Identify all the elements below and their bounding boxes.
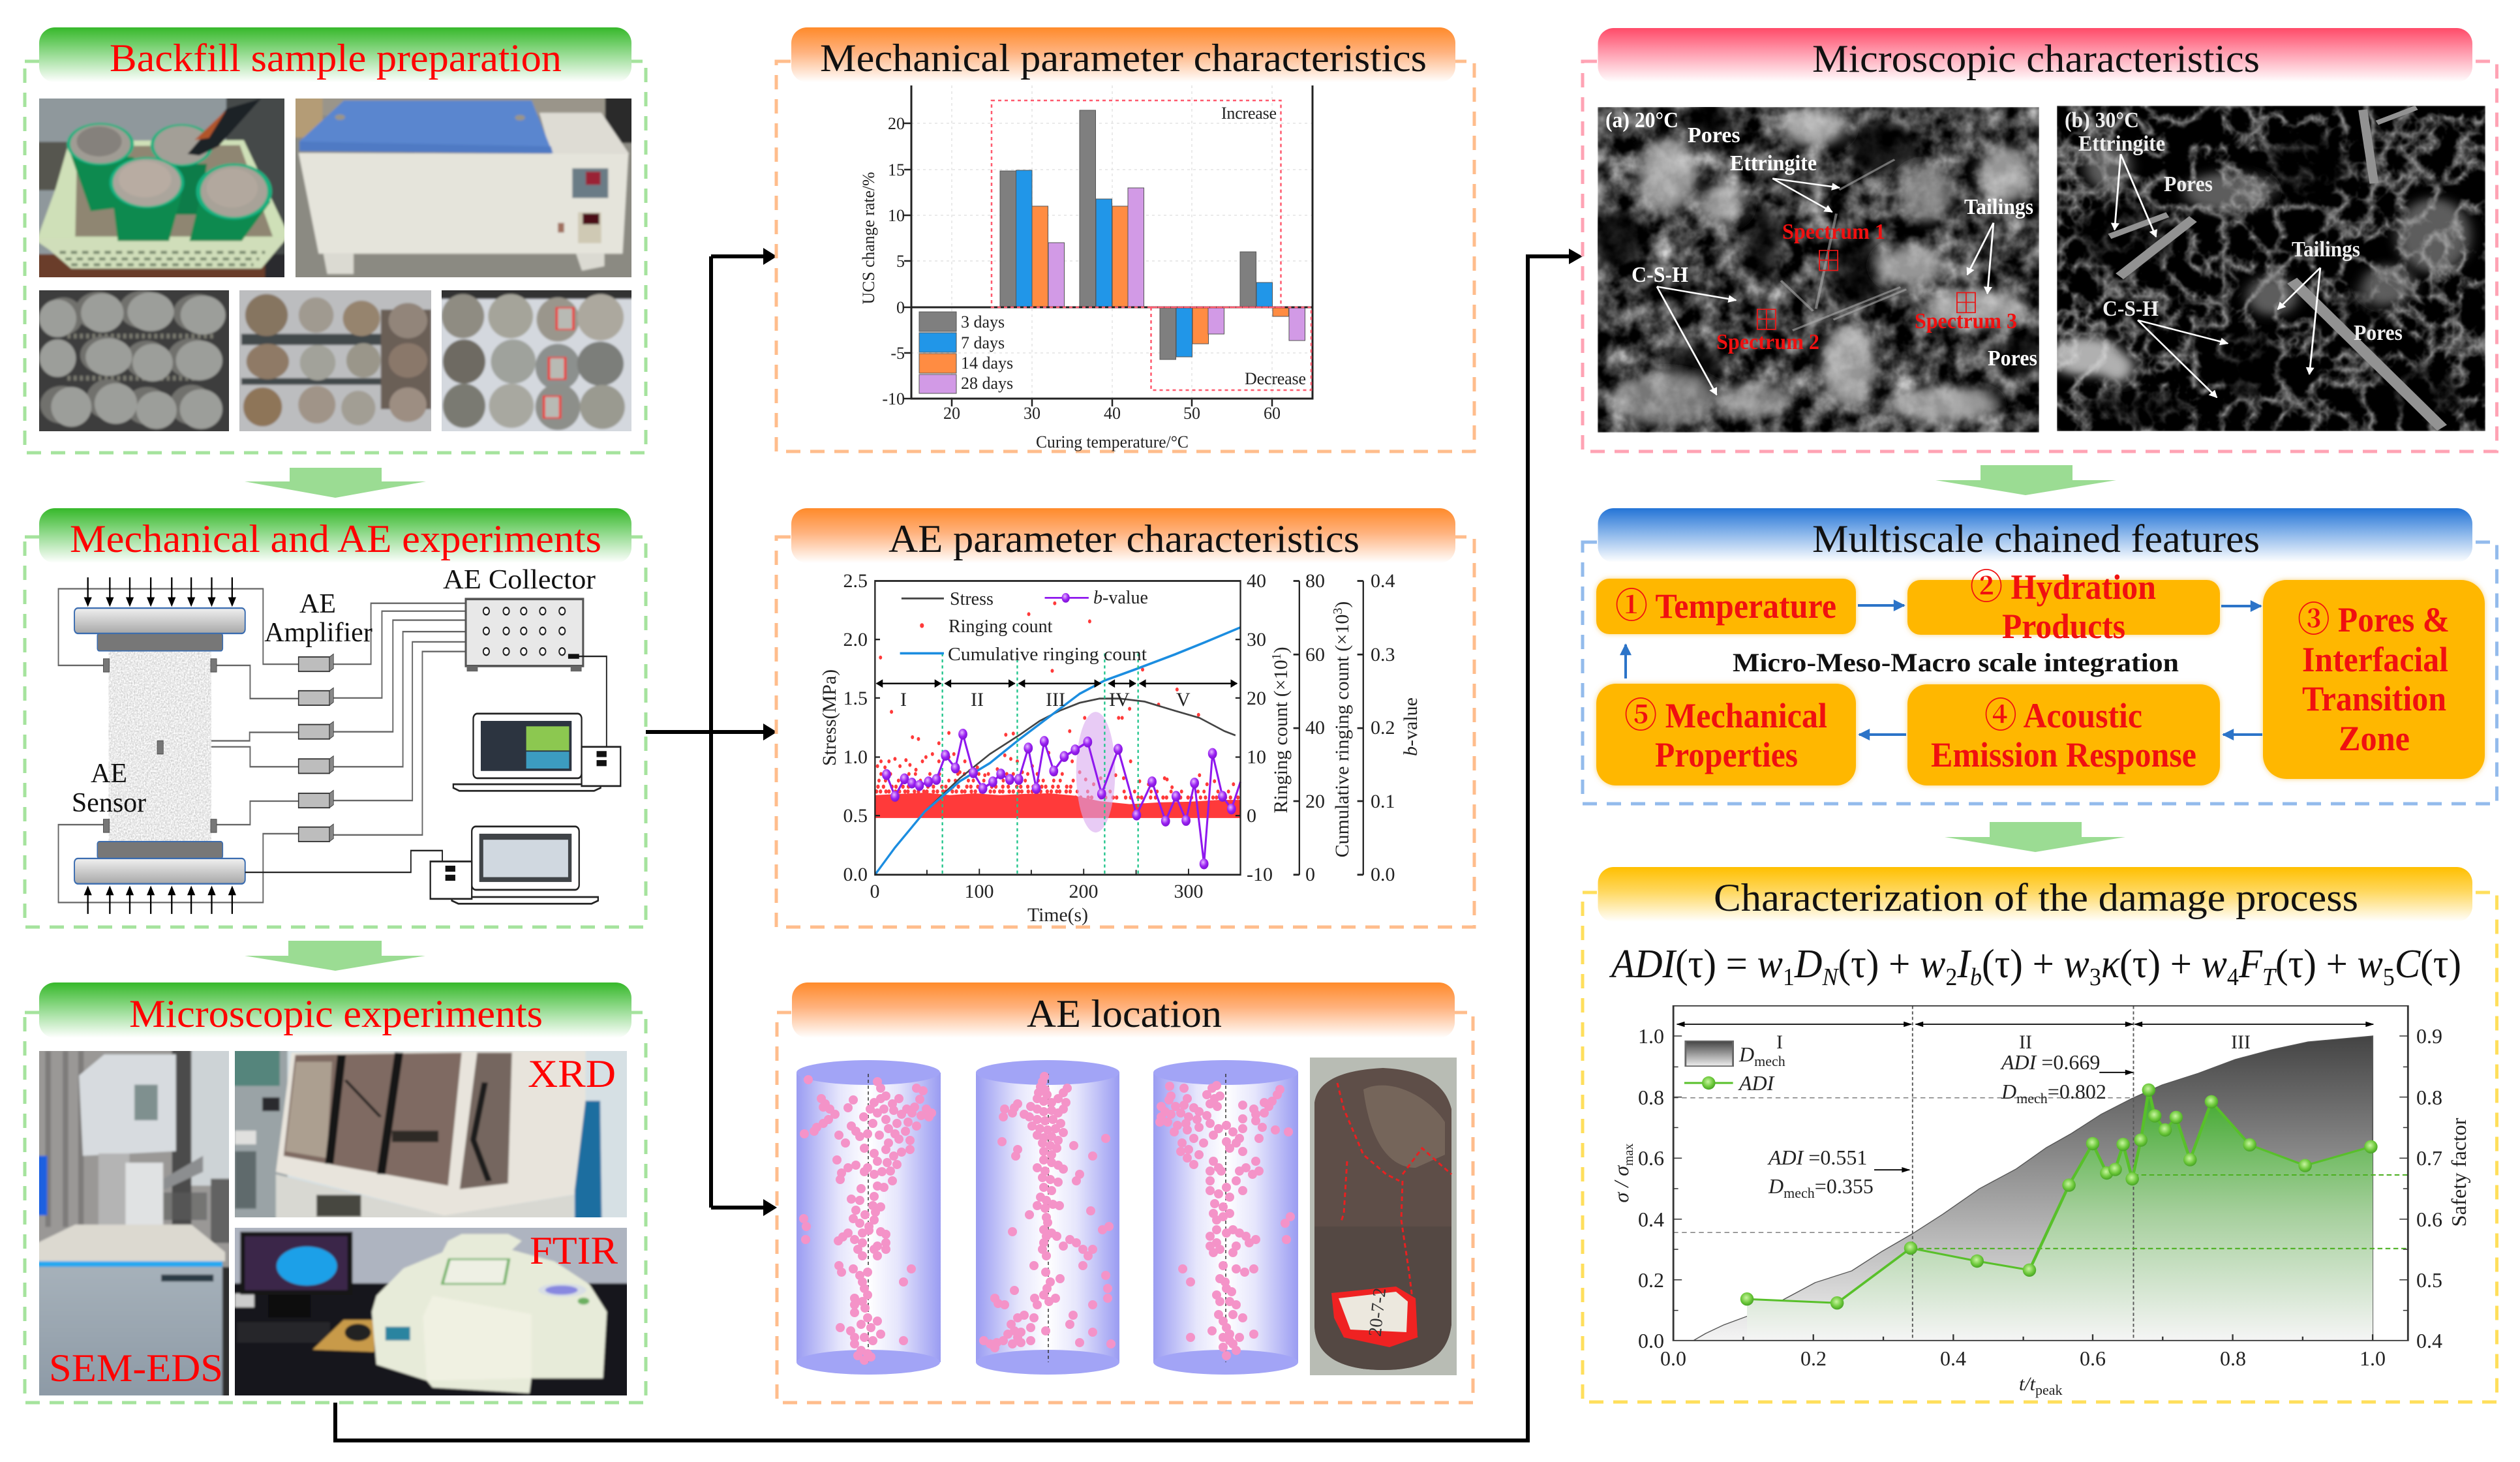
photo: XRD instrument bbox=[230, 1048, 632, 1220]
photo: failed specimen with crack bbox=[1310, 1058, 1457, 1375]
box: acoustic emission response: ④ Acoustic bbox=[1984, 696, 2142, 735]
chart: damage index and stress: max bbox=[1622, 1144, 1636, 1166]
line chart: stress, ringing count and b-value over time: I bbox=[900, 689, 907, 710]
legend bbox=[948, 588, 1148, 665]
legend: ADI bbox=[1738, 1071, 1775, 1095]
SEM labels (a): Pores bbox=[1688, 123, 1740, 147]
SEM image: (a) 20 C bbox=[1592, 99, 2043, 433]
box: pores and interfacial transition zone: Zone bbox=[2339, 719, 2410, 758]
equation: ADI: ADI(τ) = w bbox=[1611, 942, 1784, 986]
line chart: stress, ringing count and b-value over time: 1 bbox=[1269, 653, 1284, 660]
line chart: stress, ringing count and b-value over time: 2.5 bbox=[843, 570, 868, 592]
panel: mechanical parameter characteristics bbox=[776, 27, 1474, 451]
equation: ADI: 3 bbox=[2089, 964, 2101, 991]
chart: damage index and stress: I bbox=[1776, 1031, 1783, 1053]
chart: damage index and stress: 1.0 bbox=[1638, 1024, 1664, 1048]
line chart: stress, ringing count and b-value over time: 0 bbox=[870, 881, 879, 902]
line chart: stress, ringing count and b-value over time: 20 bbox=[1247, 688, 1266, 709]
SEM labels (a): Ettringite bbox=[1730, 151, 1817, 175]
line chart: stress, ringing count and b-value over time: 0.0 bbox=[1371, 864, 1395, 885]
figure: AE event cylinder 3 bbox=[1153, 1060, 1298, 1375]
line chart: stress, ringing count and b-value over time: III bbox=[1046, 689, 1065, 710]
line chart: stress, ringing count and b-value over time: 1.0 bbox=[843, 746, 868, 768]
line chart: stress, ringing count and b-value over time: 30 bbox=[1247, 629, 1266, 650]
legend: Ringing count bbox=[949, 617, 1053, 637]
legend: 14 days bbox=[961, 354, 1013, 373]
SEM labels (b): Pores bbox=[2354, 321, 2403, 345]
annotation: onset values: =0.355 bbox=[1815, 1174, 1874, 1198]
line chart: stress, ringing count and b-value over time: ) bbox=[1331, 602, 1353, 608]
chart: damage index and stress: σ / σ bbox=[1609, 1166, 1633, 1202]
line chart: stress, ringing count and b-value over time: 2.0 bbox=[843, 629, 868, 650]
box: pores and interfacial transition zone: ③ Pores & bbox=[2298, 600, 2450, 639]
annotation: peak values: =0.802 bbox=[2048, 1080, 2106, 1103]
figure: AE event cylinder 1 bbox=[797, 1060, 941, 1375]
heading: multiscale chained features: Multiscale chained features bbox=[1812, 517, 2260, 560]
SEM labels (b): C-S-H bbox=[2103, 297, 2159, 321]
chart: damage index and stress: 0.4 bbox=[1638, 1208, 1664, 1231]
panel: AE location bbox=[777, 982, 1473, 1403]
panel: AE parameter characteristics bbox=[776, 508, 1474, 927]
heading: AE location: AE location bbox=[1027, 992, 1222, 1035]
heading: microscopic experiments bbox=[39, 982, 631, 1038]
label: AE sensor: Sensor bbox=[72, 788, 146, 818]
line chart: stress, ringing count and b-value over time: 300 bbox=[1174, 881, 1203, 902]
arrow: microscopic characteristics to multiscale features bbox=[1936, 465, 2116, 495]
heading: microscopic characteristics: Microscopic characteristics bbox=[1812, 37, 2260, 80]
bar chart: UCS change rate: 5 bbox=[896, 252, 905, 271]
annotation: onset values: mech bbox=[1784, 1185, 1815, 1201]
SEM image: (b) 30 C bbox=[2049, 106, 2485, 431]
equation: ADI: (τ) + bbox=[1838, 942, 1920, 986]
SEM labels (a): Spectrum 2 bbox=[1716, 330, 1819, 354]
heading: AE location bbox=[792, 982, 1455, 1038]
heading: characterization of the damage process: Characterization of the damage process bbox=[1714, 876, 2358, 919]
annotation: onset values bbox=[1767, 1146, 1874, 1201]
photo: FTIR instrument bbox=[230, 1225, 632, 1398]
chart: damage index and stress: 0.2 bbox=[1800, 1347, 1827, 1370]
SEM labels (a): Pores bbox=[1988, 346, 2037, 371]
bar chart: UCS change rate: -10 bbox=[882, 389, 905, 408]
legend: mech bbox=[1754, 1053, 1785, 1069]
equation: ADI: κ bbox=[2101, 942, 2120, 986]
line chart: stress, ringing count and b-value over time: 0.4 bbox=[1371, 570, 1395, 592]
SEM labels (b): Tailings bbox=[2292, 237, 2360, 262]
line chart: stress, ringing count and b-value over time: Time(s) bbox=[1027, 904, 1088, 926]
bar chart: UCS change rate: UCS change rate/% bbox=[859, 172, 878, 304]
legend: b-value bbox=[1093, 588, 1148, 608]
chart: damage index and stress bbox=[1609, 1006, 2470, 1398]
equation: ADI: T bbox=[2262, 964, 2277, 991]
line chart: stress, ringing count and b-value over time: b-value bbox=[1400, 697, 1421, 756]
line chart: stress, ringing count and b-value over time: 0 bbox=[1247, 805, 1256, 827]
equation: ADI: 2 bbox=[1945, 964, 1957, 991]
line chart: stress, ringing count and b-value over time: 100 bbox=[964, 881, 994, 902]
heading: backfill sample preparation: Backfill sample preparation bbox=[110, 37, 562, 80]
panel: microscopic characteristics bbox=[1583, 28, 2497, 451]
equation: ADI: 4 bbox=[2227, 964, 2239, 991]
bar chart: UCS change rate bbox=[859, 85, 1313, 451]
line chart: stress, ringing count and b-value over time: 0.3 bbox=[1371, 644, 1395, 665]
line chart: stress, ringing count and b-value over time: Ringing count (×10 bbox=[1270, 660, 1292, 814]
line chart: stress, ringing count and b-value over time: Stress(MPa) bbox=[819, 669, 840, 766]
bar chart: UCS change rate: 15 bbox=[888, 160, 905, 179]
legend: Stress bbox=[950, 589, 994, 609]
heading: characterization of the damage process bbox=[1598, 867, 2472, 922]
SEM labels (a) bbox=[1605, 108, 2037, 371]
chart: damage index and stress: II bbox=[2019, 1031, 2032, 1053]
label: AE amplifier: AE bbox=[299, 589, 336, 619]
line chart: stress, ringing count and b-value over time: -10 bbox=[1247, 864, 1273, 885]
legend bbox=[919, 312, 1013, 393]
SEM labels (a): (a) 20°C bbox=[1605, 108, 1678, 132]
bar chart: UCS change rate: Increase bbox=[1221, 104, 1277, 123]
photo: green moulds in basket bbox=[39, 99, 284, 277]
box: hydration products: Products bbox=[2002, 607, 2125, 646]
arrows: chain flow bbox=[1626, 605, 2262, 735]
box: acoustic emission response bbox=[1907, 684, 2220, 785]
box: pores and interfacial transition zone bbox=[2263, 580, 2485, 779]
chart: damage index and stress: 0.7 bbox=[2416, 1146, 2442, 1170]
line chart: stress, ringing count and b-value over time: 10 bbox=[1247, 746, 1266, 768]
bar chart: UCS change rate: 40 bbox=[1104, 404, 1121, 423]
equation: ADI: b bbox=[1970, 964, 1982, 991]
photo: wrapped brown specimens bbox=[239, 290, 431, 431]
line chart: stress, ringing count and b-value over time: V bbox=[1176, 689, 1191, 710]
bar chart: UCS change rate: 20 bbox=[888, 114, 905, 133]
label: AE collector: AE Collector bbox=[443, 565, 596, 595]
chart: damage index and stress: 0.6 bbox=[2416, 1208, 2442, 1231]
heading: AE parameter characteristics: AE parameter characteristics bbox=[888, 517, 1359, 560]
equation: ADI: C bbox=[2395, 942, 2421, 986]
legend: 3 days bbox=[961, 312, 1005, 331]
chart: damage index and stress: Safety factor bbox=[2447, 1118, 2470, 1226]
legend: Cumulative ringing count bbox=[948, 645, 1147, 665]
equation: ADI: F bbox=[2238, 942, 2263, 986]
line chart: stress, ringing count and b-value over time bbox=[819, 570, 1421, 926]
annotation: peak values: ADI =0.669 bbox=[2000, 1050, 2100, 1074]
photo: curing box bbox=[296, 99, 631, 277]
panel: microscopic experiments bbox=[25, 982, 646, 1403]
equation: ADI: w bbox=[2064, 942, 2091, 986]
bar chart: UCS change rate: 60 bbox=[1264, 404, 1281, 423]
bar chart: UCS change rate: 10 bbox=[888, 206, 905, 225]
line chart: stress, ringing count and b-value over time: II bbox=[971, 689, 984, 710]
panel: multiscale chained features bbox=[1583, 508, 2497, 804]
bar chart: UCS change rate: 20 bbox=[943, 404, 960, 423]
SEM labels (b): Ettringite bbox=[2078, 132, 2165, 156]
chart: damage index and stress: 0.4 bbox=[1940, 1347, 1966, 1370]
box: acoustic emission response: Emission Response bbox=[1931, 735, 2196, 774]
heading: backfill sample preparation bbox=[39, 27, 631, 82]
photo: SEM-EDS instrument bbox=[33, 1048, 234, 1399]
legend: D bbox=[1739, 1043, 1754, 1066]
line chart: stress, ringing count and b-value over time: 0.1 bbox=[1371, 791, 1395, 812]
box: temperature: ① Temperature bbox=[1615, 586, 1836, 626]
bar chart: UCS change rate: -5 bbox=[890, 344, 905, 363]
line chart: stress, ringing count and b-value over time: 40 bbox=[1247, 570, 1266, 592]
panel: characterization of the damage process bbox=[1583, 867, 2497, 1402]
label: SEM-EDS: SEM-EDS bbox=[49, 1347, 223, 1390]
line chart: stress, ringing count and b-value over time: 20 bbox=[1305, 791, 1325, 812]
chart: damage index and stress: 0.9 bbox=[2416, 1024, 2442, 1048]
diagram: AE test setup bbox=[59, 565, 620, 914]
annotation: onset values: D bbox=[1768, 1174, 1784, 1198]
SEM labels (a): Spectrum 1 bbox=[1782, 220, 1885, 244]
arrow: multiscale features to damage process bbox=[1945, 822, 2125, 852]
chart: damage index and stress: peak bbox=[2035, 1382, 2063, 1398]
legend bbox=[1738, 1043, 1785, 1095]
annotation: peak values bbox=[2000, 1050, 2106, 1106]
box: hydration products: ② Hydration bbox=[1970, 568, 2156, 607]
chart: damage index and stress: t/t bbox=[2019, 1373, 2035, 1395]
equation: ADI: (τ) + bbox=[1982, 942, 2064, 986]
bar chart: UCS change rate: 30 bbox=[1024, 404, 1040, 423]
chart: damage index and stress: 0.4 bbox=[2416, 1329, 2442, 1352]
legend: 7 days bbox=[961, 333, 1005, 352]
photo: labelled specimens bbox=[442, 290, 631, 431]
heading: mechanical parameter characteristics: Mechanical parameter characteristics bbox=[820, 37, 1427, 80]
line chart: stress, ringing count and b-value over time: 0 bbox=[1305, 864, 1315, 885]
label: XRD: XRD bbox=[528, 1052, 616, 1095]
chart: damage index and stress: 0.8 bbox=[1638, 1086, 1664, 1109]
photo: grey backfill specimens bbox=[39, 290, 229, 431]
line chart: stress, ringing count and b-value over time: 60 bbox=[1305, 644, 1325, 665]
arrow: backfill to mechanical experiments bbox=[245, 468, 426, 498]
legend: 28 days bbox=[961, 374, 1013, 393]
SEM labels (a): C-S-H bbox=[1632, 263, 1688, 287]
line chart: stress, ringing count and b-value over time: Cumulative ringing count (×10 bbox=[1331, 615, 1353, 857]
SEM labels (a): Spectrum 3 bbox=[1915, 309, 2017, 333]
box: pores and interfacial transition zone: Interfacial bbox=[2302, 640, 2448, 679]
figure: AE event cylinder 2 bbox=[976, 1060, 1119, 1375]
annotation: onset values: ADI =0.551 bbox=[1767, 1146, 1867, 1169]
line chart: stress, ringing count and b-value over time: 80 bbox=[1305, 570, 1325, 592]
line chart: stress, ringing count and b-value over time: IV bbox=[1109, 689, 1130, 710]
line chart: stress, ringing count and b-value over time: 3 bbox=[1331, 608, 1345, 615]
SEM labels (a): Tailings bbox=[1964, 195, 2033, 219]
box: hydration products bbox=[1907, 568, 2220, 646]
equation: ADI: (τ) + w bbox=[2119, 942, 2228, 986]
equation: ADI: N bbox=[1822, 964, 1840, 991]
bar chart: UCS change rate: Curing temperature/°C bbox=[1036, 433, 1189, 451]
line chart: stress, ringing count and b-value over time: 200 bbox=[1069, 881, 1099, 902]
equation: ADI: D bbox=[1794, 942, 1822, 986]
heading: mechanical parameter characteristics bbox=[791, 27, 1455, 82]
bar chart: UCS change rate: 0 bbox=[896, 298, 905, 317]
arrow: mechanical experiments to microscopic experiments bbox=[245, 941, 425, 971]
equation: ADI: w bbox=[1920, 942, 1947, 986]
line chart: stress, ringing count and b-value over time: ) bbox=[1270, 647, 1292, 653]
connector: black flow lines between columns bbox=[335, 248, 1583, 1440]
line chart: stress, ringing count and b-value over time: 0.5 bbox=[843, 805, 868, 827]
photo: failed specimen with crack: 20-7-2 bbox=[1365, 1287, 1390, 1337]
label: AE sensor: AE bbox=[91, 759, 127, 789]
equation: ADI: (τ) + bbox=[2275, 942, 2358, 986]
chart: damage index and stress: 0.8 bbox=[2220, 1347, 2246, 1370]
box: mechanical properties: ⑤ Mechanical bbox=[1624, 696, 1827, 735]
SEM labels (b): Pores bbox=[2164, 172, 2213, 196]
heading: mechanical and AE experiments bbox=[39, 508, 631, 563]
label: FTIR: FTIR bbox=[530, 1229, 618, 1272]
box: temperature bbox=[1596, 579, 1856, 634]
chart: damage index and stress: 0.0 bbox=[1660, 1347, 1686, 1370]
SEM labels (b): (b) 30°C bbox=[2065, 108, 2139, 132]
chart: damage index and stress: 0.8 bbox=[2416, 1086, 2442, 1109]
chart: damage index and stress: 1.0 bbox=[2360, 1347, 2386, 1370]
heading: microscopic characteristics bbox=[1598, 28, 2472, 82]
panel: mechanical and AE experiments bbox=[25, 508, 646, 927]
heading: microscopic experiments: Microscopic experiments bbox=[129, 992, 543, 1035]
line chart: stress, ringing count and b-value over time: 0.2 bbox=[1371, 717, 1395, 739]
label: AE amplifier: Amplifier bbox=[264, 618, 372, 648]
bar chart: UCS change rate: 50 bbox=[1183, 404, 1200, 423]
box: mechanical properties: Properties bbox=[1655, 735, 1798, 774]
chart: damage index and stress: 0.0 bbox=[1638, 1329, 1664, 1352]
equation: ADI: 1 bbox=[1783, 964, 1795, 991]
chart: damage index and stress: 0.6 bbox=[1638, 1146, 1664, 1170]
SEM labels (b) bbox=[2065, 108, 2403, 345]
panel: backfill sample preparation bbox=[25, 27, 646, 453]
box: mechanical properties bbox=[1596, 684, 1856, 785]
box: pores and interfacial transition zone: Transition bbox=[2302, 679, 2446, 718]
equation: ADI: w bbox=[2358, 942, 2384, 986]
chart: damage index and stress: 0.2 bbox=[1638, 1268, 1664, 1292]
line chart: stress, ringing count and b-value over time: 1.5 bbox=[843, 688, 868, 709]
heading: multiscale chained features bbox=[1598, 508, 2472, 562]
equation: ADI: 5 bbox=[2383, 964, 2395, 991]
line chart: stress, ringing count and b-value over time: 40 bbox=[1305, 717, 1325, 739]
heading: mechanical and AE experiments: Mechanical and AE experiments bbox=[70, 517, 601, 560]
line chart: stress, ringing count and b-value over time: 0.0 bbox=[843, 864, 868, 885]
equation: ADI: (τ) bbox=[2420, 942, 2461, 986]
equation: ADI: I bbox=[1956, 942, 1972, 986]
heading: AE parameter characteristics bbox=[791, 508, 1455, 563]
bar chart: UCS change rate: Decrease bbox=[1245, 369, 1306, 388]
annotation: peak values: mech bbox=[2016, 1090, 2048, 1106]
chart: damage index and stress: 0.6 bbox=[2080, 1347, 2106, 1370]
chart: damage index and stress: III bbox=[2231, 1031, 2251, 1053]
text: micro-meso-macro scale integration: Micro-Meso-Macro scale integration bbox=[1733, 648, 2179, 677]
annotation: peak values: D bbox=[2001, 1080, 2016, 1103]
chart: damage index and stress: 0.5 bbox=[2416, 1268, 2442, 1292]
